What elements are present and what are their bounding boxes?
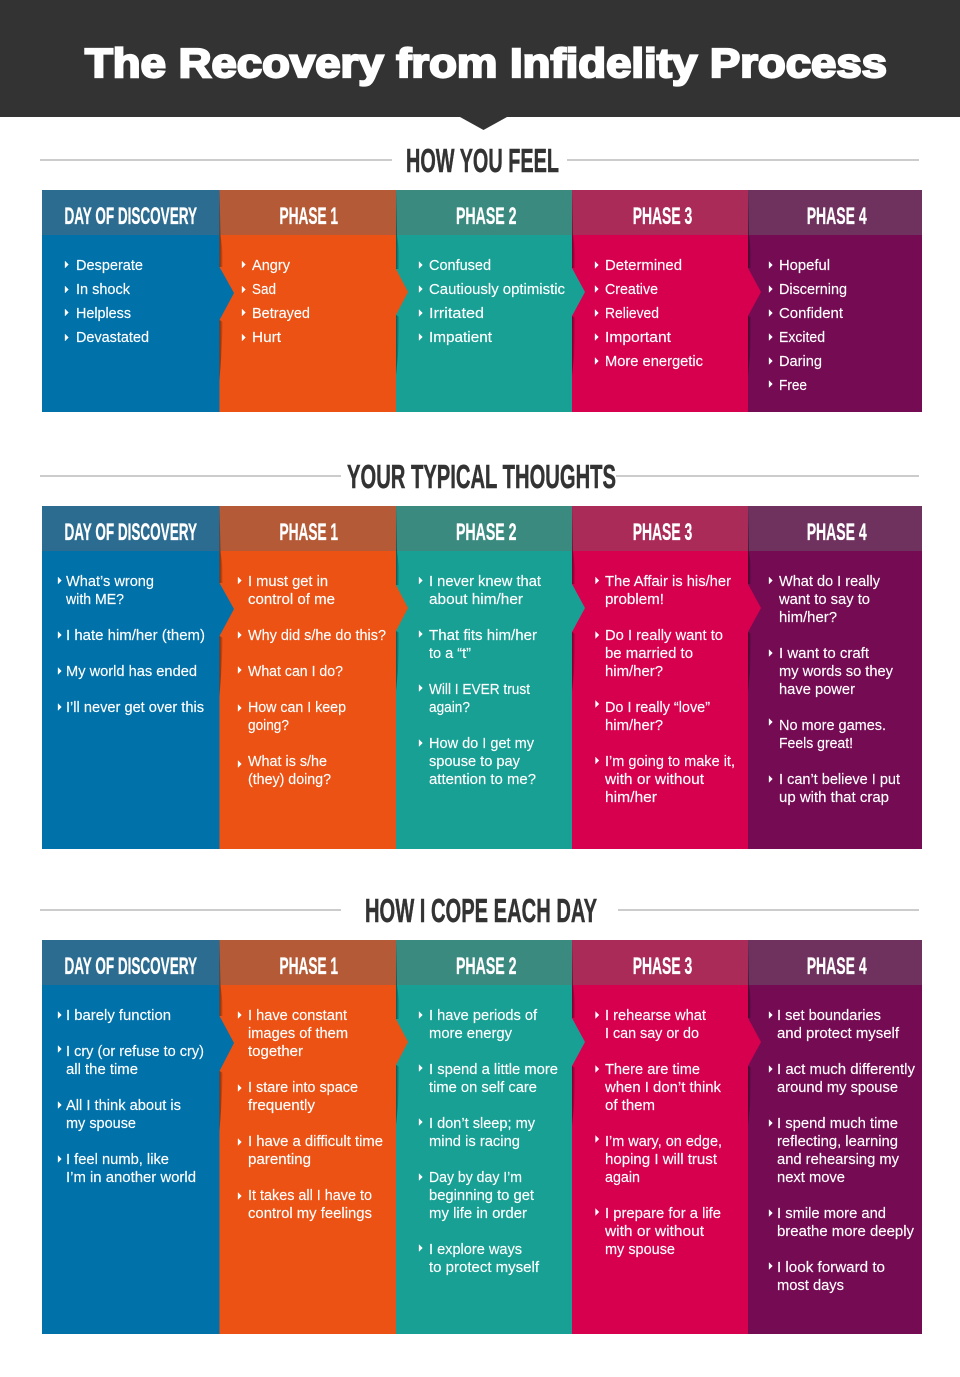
- list: [238, 573, 386, 788]
- list: All I think about is: [66, 1097, 181, 1114]
- list: What’s wrong: [66, 573, 154, 590]
- list: [769, 1007, 915, 1294]
- list: problem!: [605, 591, 664, 608]
- panel: phase 3 feelings: [572, 190, 748, 412]
- list: (they) doing?: [248, 771, 331, 788]
- column heading: PHASE 3: [633, 203, 692, 230]
- panel: phase 2 thoughts: [396, 506, 572, 849]
- list: I have constant: [248, 1007, 348, 1024]
- list: No more games.: [779, 717, 886, 734]
- list: [238, 1007, 383, 1222]
- list: I have periods of: [429, 1007, 538, 1024]
- list: reflecting, learning: [777, 1133, 898, 1150]
- list: [65, 257, 149, 346]
- list: Helpless: [76, 305, 131, 322]
- panel: phase 3 coping: [572, 940, 748, 1334]
- list: In shock: [76, 281, 130, 298]
- list: together: [248, 1043, 303, 1060]
- list: Do I really want to: [605, 627, 723, 644]
- list: [242, 257, 310, 346]
- list: I’m in another world: [66, 1169, 196, 1186]
- column heading: PHASE 1: [280, 519, 338, 546]
- arrow: discovery to phase 1: [220, 506, 234, 696]
- list: Daring: [779, 353, 822, 370]
- list: again: [605, 1169, 640, 1186]
- list: Hopeful: [779, 257, 830, 274]
- arrow: phase 3 to phase 4: [748, 190, 761, 376]
- panel: phase 4 thoughts: [748, 506, 922, 849]
- title banner: [0, 0, 960, 130]
- list: What do I really: [779, 573, 880, 590]
- panel: phase 4 coping: [748, 940, 922, 1334]
- list: Will I EVER trust: [429, 681, 531, 698]
- list: him/her?: [605, 717, 663, 734]
- list: [769, 573, 901, 806]
- list: [419, 573, 542, 788]
- panel: phase 2 feelings: [396, 190, 572, 412]
- list: about him/her: [429, 591, 523, 608]
- list: I feel numb, like: [66, 1151, 169, 1168]
- list: Cautiously optimistic: [429, 281, 565, 298]
- list: I’m wary, on edge,: [605, 1133, 722, 1150]
- list: I spend a little more: [429, 1061, 558, 1078]
- list: him/her?: [605, 663, 663, 680]
- arrow: phase 1 to phase 2: [396, 506, 408, 691]
- list: mind is racing: [429, 1133, 520, 1150]
- title: The Recovery from Infidelity Process: [85, 40, 887, 86]
- list: have power: [779, 681, 855, 698]
- list: my spouse: [66, 1115, 136, 1132]
- list: I set boundaries: [777, 1007, 881, 1024]
- list: and protect myself: [777, 1025, 900, 1042]
- panel: day of discovery coping: [42, 940, 220, 1334]
- list: Free: [779, 377, 807, 394]
- list: Irritated: [429, 305, 484, 322]
- list: How can I keep: [248, 699, 346, 716]
- column heading: PHASE 4: [807, 953, 867, 980]
- arrow: phase 1 to phase 2: [396, 190, 408, 375]
- arrow: phase 2 to phase 3: [572, 506, 585, 692]
- list: my words so they: [779, 663, 893, 680]
- column heading: PHASE 2: [456, 203, 516, 230]
- list: Do I really “love”: [605, 699, 710, 716]
- list: I act much differently: [777, 1061, 915, 1078]
- list: want to say to: [778, 591, 870, 608]
- list: Determined: [605, 257, 682, 274]
- list: control of me: [248, 591, 335, 608]
- list: again?: [429, 699, 470, 716]
- list: attention to me?: [429, 771, 536, 788]
- list: all the time: [66, 1061, 138, 1078]
- list: Excited: [779, 329, 825, 346]
- list: up with that crap: [779, 789, 889, 806]
- list: be married to: [605, 645, 693, 662]
- list: beginning to get: [429, 1187, 535, 1204]
- list: I look forward to: [777, 1259, 885, 1276]
- list: I can say or do: [605, 1025, 699, 1042]
- list: I barely function: [66, 1007, 171, 1024]
- list: [58, 573, 205, 716]
- list: What is s/he: [248, 753, 327, 770]
- list: Sad: [252, 281, 276, 298]
- list: when I don’t think: [604, 1079, 721, 1096]
- list: with or without: [604, 1223, 705, 1240]
- panel: day of discovery thoughts: [42, 506, 220, 849]
- list: with or without: [604, 771, 705, 788]
- arrow: phase 1 to phase 2: [396, 940, 408, 1125]
- list: my life in order: [429, 1205, 527, 1222]
- arrow: discovery to phase 1: [220, 190, 234, 380]
- list: [419, 1007, 558, 1276]
- list: I hate him/her (them): [66, 627, 205, 644]
- list: I have a difficult time: [248, 1133, 383, 1150]
- list: I want to craft: [779, 645, 870, 662]
- list: with ME?: [65, 591, 124, 608]
- list: most days: [777, 1277, 844, 1294]
- section: your typical thoughts: [42, 459, 922, 849]
- panel: phase 2 coping: [396, 940, 572, 1334]
- list: [58, 1007, 204, 1186]
- heading: how you feel: HOW YOU FEEL: [406, 143, 559, 180]
- list: I can’t believe I put: [779, 771, 901, 788]
- list: I cry (or refuse to cry): [66, 1043, 204, 1060]
- column heading: PHASE 4: [807, 519, 867, 546]
- list: frequently: [248, 1097, 316, 1114]
- list: Betrayed: [252, 305, 310, 322]
- panel: phase 1 coping: [220, 940, 396, 1334]
- list: I explore ways: [429, 1241, 522, 1258]
- list: Confident: [779, 305, 844, 322]
- list: control my feelings: [248, 1205, 372, 1222]
- column heading: DAY OF DISCOVERY: [64, 953, 197, 980]
- list: to protect myself: [429, 1259, 540, 1276]
- list: spouse to pay: [429, 753, 520, 770]
- list: [419, 257, 565, 346]
- section: how i cope each day: [42, 893, 922, 1334]
- list: Discerning: [779, 281, 847, 298]
- panel: phase 4 feelings: [748, 190, 922, 412]
- arrow: phase 2 to phase 3: [572, 190, 585, 376]
- list: [595, 257, 703, 370]
- column heading: DAY OF DISCOVERY: [64, 203, 197, 230]
- list: next move: [777, 1169, 845, 1186]
- list: Confused: [429, 257, 491, 274]
- list: My world has ended: [66, 663, 197, 680]
- column heading: PHASE 1: [280, 953, 338, 980]
- list: Creative: [605, 281, 658, 298]
- arrow: phase 3 to phase 4: [748, 940, 761, 1126]
- list: Day by day I’m: [429, 1169, 522, 1186]
- column heading: PHASE 1: [280, 203, 338, 230]
- list: What can I do?: [248, 663, 343, 680]
- heading: how i cope each day: HOW I COPE EACH DAY: [365, 893, 597, 930]
- list: Devastated: [76, 329, 149, 346]
- list: hoping I will trust: [605, 1151, 718, 1168]
- arrow: phase 2 to phase 3: [572, 940, 585, 1126]
- list: More energetic: [605, 353, 703, 370]
- list: breathe more deeply: [777, 1223, 914, 1240]
- arrow: phase 3 to phase 4: [748, 506, 761, 692]
- list: I’m going to make it,: [605, 753, 735, 770]
- list: Feels great!: [779, 735, 853, 752]
- list: I smile more and: [777, 1205, 886, 1222]
- panel: day of discovery feelings: [42, 190, 220, 412]
- column heading: PHASE 4: [807, 203, 867, 230]
- list: and rehearsing my: [777, 1151, 899, 1168]
- column heading: PHASE 2: [456, 953, 516, 980]
- column heading: PHASE 3: [633, 953, 692, 980]
- list: my spouse: [605, 1241, 675, 1258]
- list: around my spouse: [777, 1079, 898, 1096]
- list: Important: [605, 329, 672, 346]
- list: [596, 573, 735, 806]
- list: I never knew that: [429, 573, 542, 590]
- list: him/her: [605, 789, 657, 806]
- list: I prepare for a life: [605, 1205, 721, 1222]
- panel: phase 1 thoughts: [220, 506, 396, 849]
- list: more energy: [429, 1025, 512, 1042]
- list: I stare into space: [248, 1079, 358, 1096]
- list: I rehearse what: [605, 1007, 707, 1024]
- list: That fits him/her: [429, 627, 537, 644]
- column heading: PHASE 3: [633, 519, 692, 546]
- list: Angry: [252, 257, 290, 274]
- list: parenting: [248, 1151, 311, 1168]
- arrow: discovery to phase 1: [220, 940, 234, 1131]
- heading: your typical thoughts: YOUR TYPICAL THOUGHTS: [347, 459, 616, 496]
- panel: phase 1 feelings: [220, 190, 396, 412]
- list: I don’t sleep; my: [429, 1115, 535, 1132]
- list: I’ll never get over this: [66, 699, 204, 716]
- list: It takes all I have to: [248, 1187, 372, 1204]
- list: How do I get my: [429, 735, 534, 752]
- list: Impatient: [429, 329, 493, 346]
- list: I spend much time: [777, 1115, 898, 1132]
- list: I must get in: [248, 573, 328, 590]
- list: Hurt: [252, 329, 282, 346]
- list: time on self care: [429, 1079, 537, 1096]
- panel: phase 3 thoughts: [572, 506, 748, 849]
- list: Desperate: [76, 257, 143, 274]
- list: [596, 1007, 722, 1258]
- list: [769, 257, 847, 394]
- list: to a “t”: [429, 645, 471, 662]
- list: going?: [248, 717, 289, 734]
- list: images of them: [248, 1025, 348, 1042]
- list: Relieved: [605, 305, 659, 322]
- list: him/her?: [779, 609, 837, 626]
- list: There are time: [605, 1061, 700, 1078]
- list: of them: [605, 1097, 655, 1114]
- list: The Affair is his/her: [605, 573, 731, 590]
- column heading: PHASE 2: [456, 519, 516, 546]
- list: Why did s/he do this?: [248, 627, 386, 644]
- section: how you feel: [42, 143, 922, 412]
- column heading: DAY OF DISCOVERY: [64, 519, 197, 546]
